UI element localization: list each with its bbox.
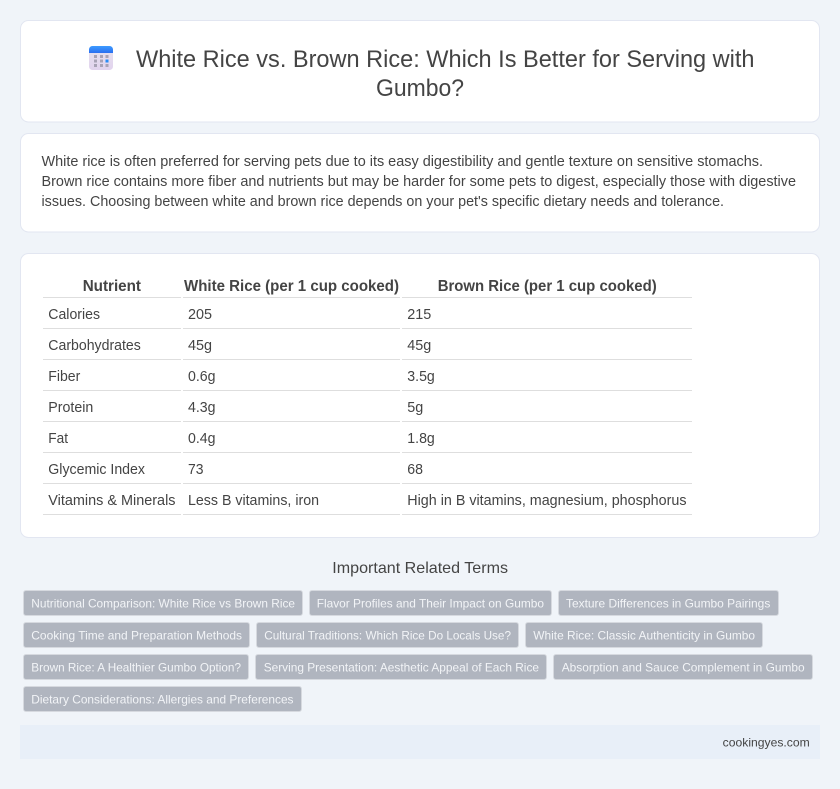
title: White Rice vs. Brown Rice: Which Is Better for Serving with: [136, 46, 754, 73]
related term tags: [24, 590, 812, 712]
tag: Serving Presentation: Aesthetic Appeal of Each Rice: [264, 660, 539, 674]
row: fat: 0.4g: [188, 431, 216, 447]
row: vitamins and minerals: Vitamins & Minerals: [48, 493, 175, 509]
row: glycemic index: 73: [188, 462, 204, 478]
tag: Texture Differences in Gumbo Pairings: [566, 596, 770, 610]
row: vitamins and minerals: High in B vitamins, magnesium, phosphorus: [407, 493, 686, 509]
heading: related terms: Important Related Terms: [332, 560, 508, 577]
table header: Brown Rice (per 1 cup cooked): [438, 278, 657, 295]
row: fiber: Fiber: [48, 369, 80, 385]
panel: nutrient table: [20, 254, 820, 538]
tag: Cultural Traditions: Which Rice Do Locals Use?: [264, 628, 511, 642]
description text: White rice is often preferred for serving pets due to its easy digestibility and gentle texture on sensitive stomachs.: [42, 154, 763, 170]
row: protein: [48, 400, 423, 416]
row: carbohydrates: 45g: [188, 338, 212, 354]
row: fiber: 3.5g: [407, 369, 435, 385]
row: vitamins and minerals: [48, 493, 687, 509]
tag: Flavor Profiles and Their Impact on Gumbo: [317, 596, 544, 610]
table header: Nutrient: [83, 278, 142, 295]
description text: [42, 154, 796, 210]
title: [136, 46, 754, 102]
row: fat: 1.8g: [407, 431, 435, 447]
table header: [83, 278, 657, 295]
tag: [256, 654, 546, 680]
tag: [24, 590, 302, 616]
row: protein: 4.3g: [188, 400, 216, 416]
row: calories: Calories: [48, 307, 100, 323]
row: carbohydrates: [48, 338, 431, 354]
tag: Dietary Considerations: Allergies and Preferences: [31, 692, 294, 706]
tag: Cooking Time and Preparation Methods: [31, 628, 242, 642]
row: calories: 205: [188, 307, 212, 323]
table header: White Rice (per 1 cup cooked): [184, 278, 399, 295]
row: calories: [48, 307, 431, 323]
row: fat: [48, 431, 435, 447]
footer: [20, 725, 820, 759]
icon: calendar: [89, 46, 113, 70]
description text: issues. Choosing between white and brown rice depends on your pet's specific dietary needs and tolerance.: [42, 194, 724, 210]
tag: [24, 622, 250, 648]
table grid lines: [43, 297, 692, 515]
tag: [554, 654, 812, 680]
row: protein: 5g: [407, 400, 423, 416]
tag: White Rice: Classic Authenticity in Gumbo: [533, 628, 755, 642]
tag: [24, 686, 302, 712]
tag: [558, 590, 778, 616]
row: protein: Protein: [48, 400, 93, 416]
description text: Brown rice contains more fiber and nutrients but may be harder for some pets to digest, especially those with digestive: [42, 174, 796, 190]
row: vitamins and minerals: Less B vitamins, iron: [188, 493, 319, 509]
panel: header: [20, 20, 820, 122]
tag: Brown Rice: A Healthier Gumbo Option?: [31, 660, 241, 674]
tag: [256, 622, 518, 648]
row: glycemic index: [48, 462, 423, 478]
tag: [310, 590, 552, 616]
row: carbohydrates: Carbohydrates: [48, 338, 141, 354]
tag: [526, 622, 762, 648]
row: glycemic index: Glycemic Index: [48, 462, 146, 478]
footer: cookingyes.com: [723, 735, 810, 749]
tag: [24, 654, 248, 680]
row: fiber: [48, 369, 435, 385]
tag: Nutritional Comparison: White Rice vs Brown Rice: [31, 596, 295, 610]
title: Gumbo?: [376, 75, 464, 102]
tag: Absorption and Sauce Complement in Gumbo: [562, 660, 805, 674]
row: glycemic index: 68: [407, 462, 423, 478]
row: fiber: 0.6g: [188, 369, 216, 385]
row: calories: 215: [407, 307, 431, 323]
row: fat: Fat: [48, 431, 68, 447]
panel: description: [20, 134, 820, 232]
row: carbohydrates: 45g: [407, 338, 431, 354]
